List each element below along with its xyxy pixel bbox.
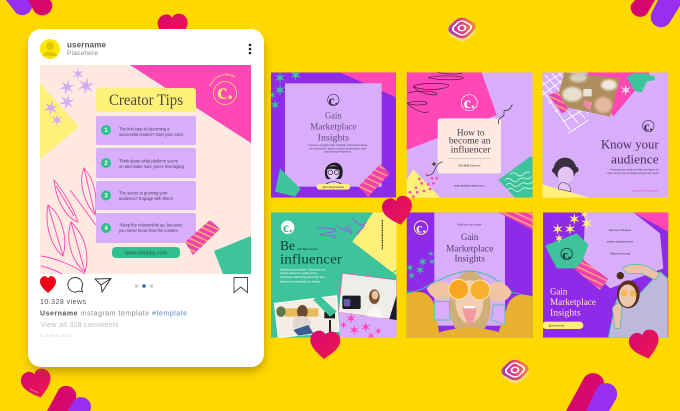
- heading: creator tips: Creator Tips: [109, 92, 183, 109]
- tip 1: successful creator? Own your voice: [119, 132, 184, 137]
- tip 2: 2: [104, 161, 108, 167]
- panel: tile be influencer: With Neil Salomon: [297, 248, 319, 251]
- button: website: www.shoppy.com: [124, 251, 168, 257]
- logo: post: [209, 74, 237, 105]
- tip 2: on and make sure you're leveraging: [119, 164, 185, 169]
- tip 3: The secret to growing your: [119, 190, 168, 196]
- panel: tile know your audience: Know your: [601, 136, 659, 151]
- panel: tile gain marketplace with oranges: Gain: [461, 232, 479, 242]
- panel: creator tips post: [40, 65, 251, 278]
- icon: instagram top: [443, 15, 481, 44]
- panel: tile gain marketplace with woman: Videos every day: [610, 251, 631, 255]
- photo: creator with camera: [338, 273, 397, 320]
- panel: tile gain marketplace with oranges: Insights: [454, 254, 486, 264]
- panel: tile know your audience: [542, 72, 668, 198]
- tip 4: 4: [104, 226, 108, 232]
- username: username: [67, 40, 107, 50]
- character: [325, 163, 343, 187]
- panel: tile gain marketplace with woman: create original content: [607, 240, 633, 244]
- panel: tile gain marketplace with woman: Gain: [550, 286, 568, 296]
- panel: tile gain marketplace insights: Customer insights offer valuable information about: [308, 143, 368, 147]
- panel: tile gain marketplace insights: Gain: [325, 110, 342, 121]
- icon: heart between tiles bottom: [309, 330, 341, 360]
- panel: tile how to become an influencer: influencer: [451, 145, 491, 155]
- panel: tile gain marketplace insights: Marketplace: [310, 122, 357, 133]
- panel: tile be influencer: Influencers build a big name over time.: [280, 275, 326, 279]
- panel: tile be influencer: Influencers experience the feeling.: [280, 279, 321, 283]
- tape over tip: [185, 220, 220, 255]
- logo: post: THE GOOD COMPANY: [209, 74, 236, 86]
- panel: tile be influencer: curious about the exciting thing.: [280, 271, 318, 275]
- timestamp: 5 DAYS AGO: [40, 333, 72, 338]
- tip 1: [96, 116, 196, 145]
- photo: creator with guitar: [274, 296, 339, 338]
- tip 3: 3: [104, 194, 108, 200]
- stars: [43, 68, 95, 126]
- panel: tile know your audience: what content and messages people care about: [607, 172, 659, 175]
- panel: tile gain marketplace with oranges: Build your own Image: [457, 224, 482, 227]
- panel: tile gain marketplace with oranges: [406, 212, 533, 338]
- panel: tile be influencer: influencer: [280, 252, 342, 267]
- panel: tile how to become an influencer: www.goodcompany.com: [454, 183, 485, 187]
- panel: tile gain marketplace with woman: Get more followers: [609, 228, 632, 232]
- panel: tile how to become an influencer: c.: [464, 95, 475, 112]
- tip 2: Think about what platform you're: [119, 158, 179, 164]
- panel: tile know your audience: www.goodcompany.com: [632, 189, 659, 192]
- panel: tile gain marketplace with oranges: c.: [416, 222, 426, 237]
- panel: tile gain marketplace with woman: [542, 210, 668, 338]
- icon: like heart: [40, 276, 56, 293]
- grid: [542, 72, 588, 133]
- carousel dots: [135, 284, 153, 288]
- panel: tile gain marketplace with woman: Marketplace: [550, 297, 596, 307]
- tip 4: you never know how the content: [119, 228, 179, 233]
- icon: comment: [68, 277, 83, 292]
- photo: woman with oranges: [407, 271, 533, 338]
- caption: Username instagram template #template: [40, 310, 187, 318]
- placeholder label: Placehere: [67, 50, 98, 57]
- tip 1: The first step to becoming a: [119, 126, 170, 132]
- icon: avatar: [40, 39, 60, 59]
- card shadow: [30, 36, 264, 371]
- leaves: [41, 168, 96, 278]
- tip 4: [96, 213, 196, 243]
- panel: instagram post card: [28, 29, 264, 367]
- panel: tile gain marketplace insights: the consumer's wants, product performance and: [309, 146, 367, 150]
- icon: heart between tiles top: [380, 194, 416, 228]
- panel: tile gain marketplace insights: purchasing behaviours: [324, 150, 352, 154]
- icon: heart bottom left: [19, 367, 55, 401]
- panel: tile be influencer: Influencers are people. Influencers are: [280, 267, 326, 271]
- tip 3: audience? Engage with them!: [119, 196, 173, 201]
- photo: woman with sunglasses: [608, 264, 668, 338]
- decorative bars: bottom right: [566, 373, 617, 411]
- decorative bars: bottom left: [47, 386, 91, 411]
- panel: tile know your audience: c.: [644, 120, 653, 134]
- panel: tile how to become an influencer: How to: [457, 127, 485, 137]
- panel: tile gain marketplace insights: @reallygreatsite: [323, 185, 344, 189]
- panel: tile how to become an influencer: [407, 72, 534, 198]
- decorative bars: top left: [6, 0, 52, 15]
- panel: tile be influencer: Be: [280, 239, 295, 254]
- icon: menu dots: [249, 44, 251, 54]
- views: 10.328 views: [40, 299, 86, 306]
- panel: tile gain marketplace with woman: @essentials: [548, 324, 565, 328]
- panel: tile how to become an influencer: With Neil Salomon: [458, 163, 481, 167]
- panel: tile gain marketplace with woman: c.: [563, 247, 571, 261]
- tip 1: 1: [104, 128, 108, 134]
- tip 3: [96, 181, 196, 210]
- tip 2: [96, 148, 196, 178]
- panel: tile be influencer: c.: [283, 220, 292, 235]
- panel: tile gain marketplace insights: [269, 69, 396, 198]
- icon: instagram bottom: [496, 357, 534, 386]
- icon: heart top: [157, 13, 189, 43]
- tip 4: "Keep the relationship up, because: [119, 222, 183, 228]
- panel: tile be influencer: [271, 212, 397, 340]
- heading: creator tips: [96, 88, 196, 112]
- panel: tile know your audience: Knowing your audience helps you figure out: [610, 168, 659, 171]
- logo: post: c.: [217, 79, 233, 104]
- puzzle: [627, 73, 655, 92]
- icon: heart bottom right: [627, 328, 663, 362]
- panel: tile how to become an influencer: become an: [449, 136, 491, 146]
- panel: tile gain marketplace with oranges: Marketplace: [446, 243, 493, 253]
- button: website: [112, 247, 180, 258]
- comments link: View all 328 comments: [40, 322, 119, 329]
- photo: flat lay: [556, 72, 620, 117]
- character: [552, 158, 579, 192]
- icon: send: [95, 278, 111, 292]
- icon: bookmark: [234, 278, 248, 292]
- panel: tile know your audience: audience: [611, 151, 659, 166]
- panel: tile gain marketplace with woman: Insights: [550, 307, 581, 317]
- panel: tile gain marketplace insights: Insights: [318, 132, 349, 143]
- panel: tile gain marketplace insights: c.: [328, 94, 338, 109]
- decorative bars: top right: [631, 0, 680, 27]
